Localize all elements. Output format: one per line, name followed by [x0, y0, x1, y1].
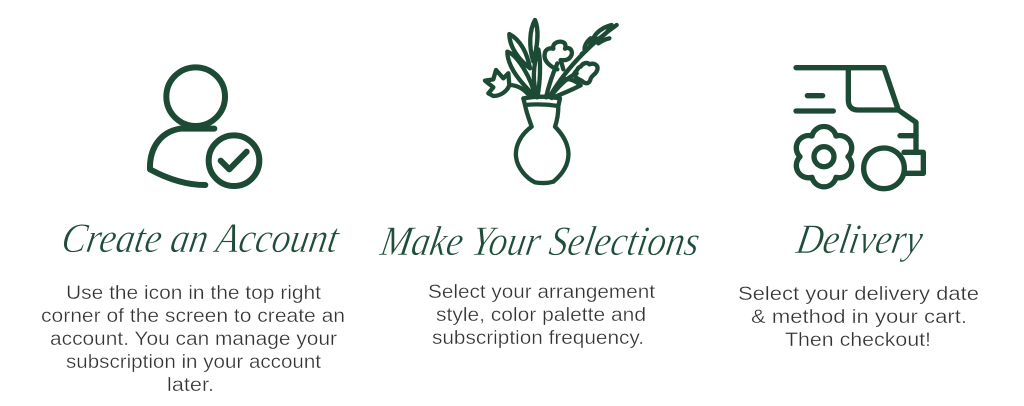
text: delivery description: Then checkout!: [785, 330, 931, 351]
text: make your selections description: Select your arrangement: [428, 282, 656, 303]
text: create an account description: [41, 283, 345, 396]
panel: make your selections: [376, 20, 703, 349]
text: delivery description: Select your delivery date: [738, 284, 979, 305]
text: make your selections description: subscription frequency.: [432, 328, 644, 349]
icon: user with check mark: [150, 67, 259, 186]
heading: delivery: Delivery: [792, 216, 927, 263]
text: create an account description: account. You can manage your: [50, 329, 338, 350]
text: create an account description: subscription in your account: [66, 352, 322, 373]
panel: create an account: [41, 67, 345, 396]
icon: flowers in a vase: [485, 20, 617, 183]
text: create an account description: corner of the screen to create an: [41, 306, 345, 327]
heading: create an account: Create an Account: [58, 215, 344, 262]
text: make your selections description: [428, 282, 656, 349]
text: delivery description: [738, 284, 979, 351]
heading: make your selections: Make Your Selections: [376, 218, 703, 265]
text: create an account description: later.: [167, 375, 214, 396]
text: make your selections description: style, color palette and: [436, 305, 646, 326]
text: delivery description: & method in your cart.: [751, 307, 967, 328]
icon: delivery truck with flower: [796, 68, 923, 189]
text: create an account description: Use the icon in the top right: [66, 283, 322, 304]
panel: delivery: [738, 68, 979, 351]
